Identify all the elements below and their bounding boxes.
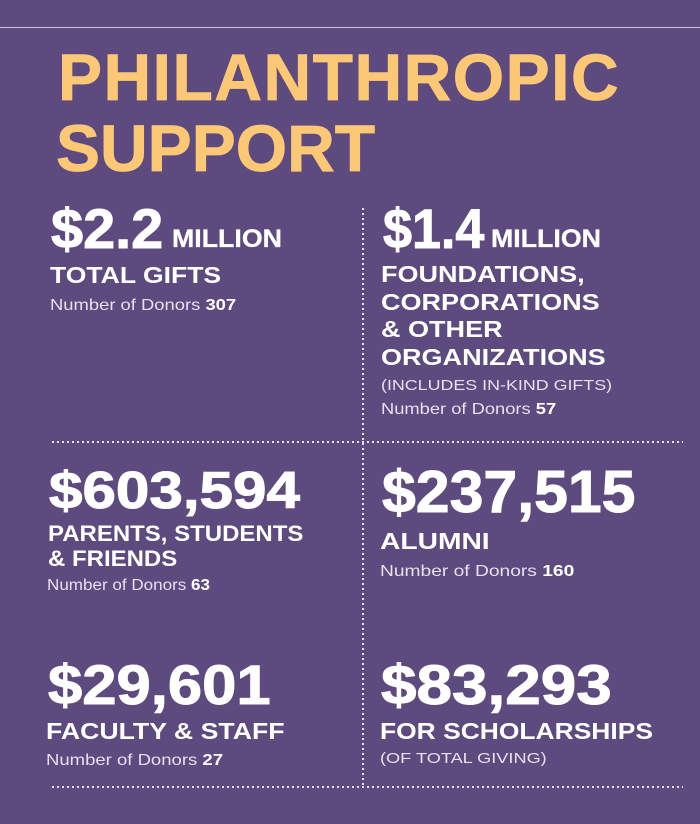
- stat: scholarships: [380, 653, 653, 767]
- title: PHILANTHROPIC: [58, 40, 620, 114]
- title: SUPPORT: [56, 111, 375, 185]
- stat: faculty: [46, 653, 285, 769]
- unit: MILLION: [491, 225, 601, 253]
- amount: $603,594: [49, 462, 300, 520]
- unit: MILLION: [172, 225, 282, 253]
- donors: Number of Donors 27: [46, 752, 223, 769]
- stat: total gifts: [50, 197, 282, 314]
- label: & FRIENDS: [48, 546, 177, 571]
- donors: Number of Donors 160: [380, 562, 574, 580]
- stat: parents: [47, 462, 303, 594]
- stat: alumni: [380, 459, 635, 580]
- stat: foundations: [381, 197, 612, 418]
- title: [56, 40, 620, 185]
- amount: $29,601: [48, 653, 271, 716]
- donors: Number of Donors 63: [47, 577, 210, 594]
- label: [48, 521, 303, 571]
- label: PARENTS, STUDENTS: [48, 521, 303, 546]
- label: CORPORATIONS: [381, 289, 600, 315]
- label: FOR SCHOLARSHIPS: [380, 718, 653, 744]
- label: & OTHER: [381, 316, 503, 342]
- vertical dotted divider: [362, 208, 364, 786]
- donors: Number of Donors 57: [381, 401, 556, 418]
- donors: Number of Donors 307: [50, 296, 236, 314]
- note: (INCLUDES IN-KIND GIFTS): [381, 377, 612, 394]
- note: (OF TOTAL GIVING): [380, 750, 547, 767]
- amount: $237,515: [382, 459, 635, 525]
- horizontal dotted divider upper: [52, 441, 683, 443]
- amount: $1.4: [383, 197, 484, 260]
- label: [381, 261, 606, 370]
- horizontal dotted divider lower: [52, 786, 683, 788]
- label: FOUNDATIONS,: [381, 261, 585, 287]
- label: TOTAL GIFTS: [50, 262, 221, 288]
- label: FACULTY & STAFF: [46, 718, 285, 744]
- amount: $2.2: [51, 197, 163, 260]
- label: ALUMNI: [380, 528, 490, 554]
- amount: $83,293: [381, 653, 612, 716]
- top rule: [0, 27, 700, 28]
- label: ORGANIZATIONS: [381, 344, 606, 370]
